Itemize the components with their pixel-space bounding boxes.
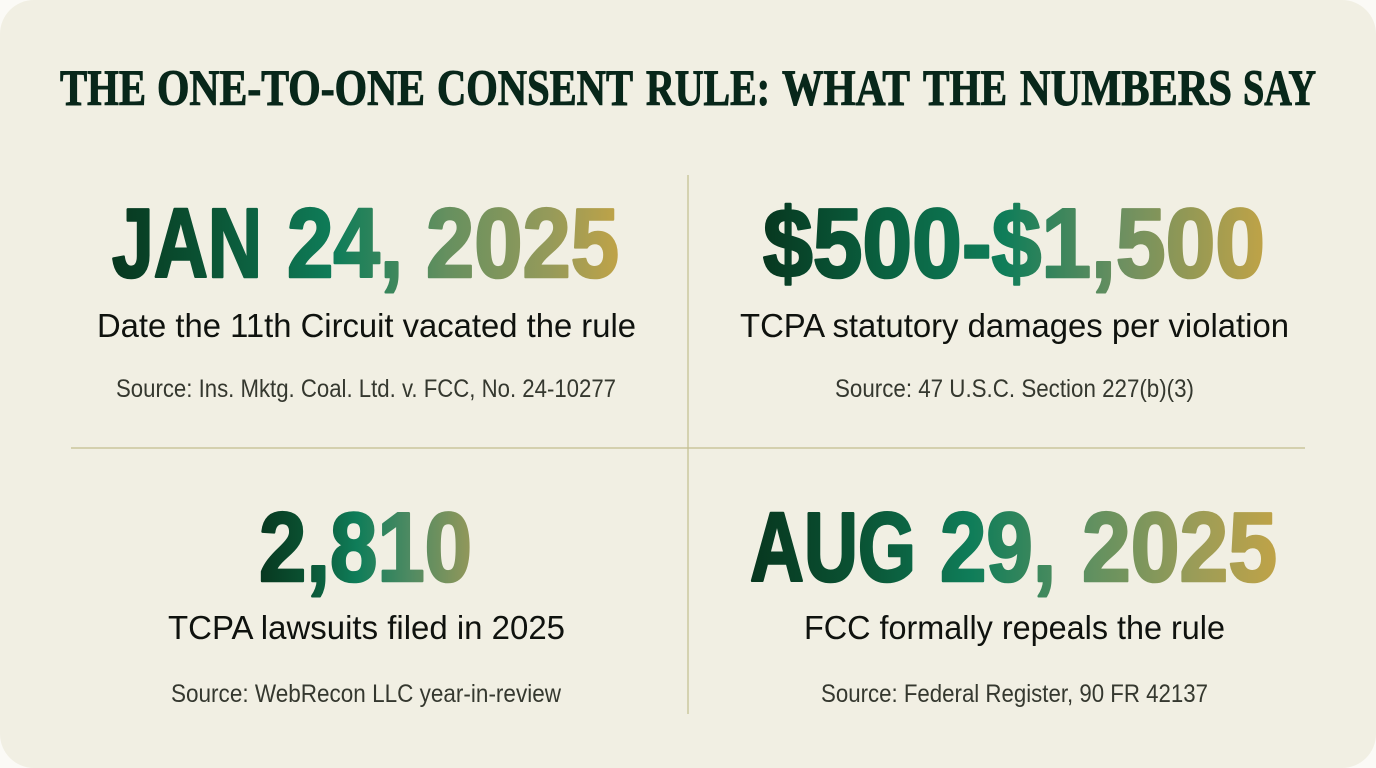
title: RULE: — [646, 61, 770, 117]
title: THE — [923, 61, 1007, 117]
panel: repeal date — [750, 492, 1277, 708]
source: repeal: Source: Federal Register, 90 FR 42137 — [821, 680, 1208, 708]
description: lawsuits: TCPA lawsuits filed in 2025 — [168, 609, 565, 646]
big number: Aug 29, 2025 — [750, 492, 1277, 602]
title: THE — [60, 61, 146, 117]
title: WHAT — [782, 61, 910, 117]
big number: damages: $500-$1,500 — [763, 188, 1265, 298]
big number: Jan 24, 2025: 24, — [287, 188, 403, 298]
big number: lawsuits: 2,810 — [259, 492, 472, 602]
big number: Jan 24, 2025 — [112, 188, 619, 298]
source: lawsuits: Source: WebRecon LLC year-in-review — [171, 680, 562, 708]
panel: vacated date — [97, 188, 636, 403]
big number: Jan 24, 2025: JAN — [112, 188, 262, 298]
description: repeal: FCC formally repeals the rule — [804, 609, 1225, 646]
panel: statutory damages — [740, 188, 1289, 403]
title: NUMBERS — [1020, 61, 1232, 117]
big number: Aug 29, 2025: 2025 — [1082, 492, 1277, 602]
title: SAY — [1243, 61, 1316, 117]
panel: lawsuits — [168, 492, 565, 708]
description: damages: TCPA statutory damages per violation — [740, 307, 1289, 344]
description: vacated: Date the 11th Circuit vacated the rule — [97, 307, 636, 344]
title: ONE-TO-ONE — [157, 61, 425, 117]
title — [60, 61, 1316, 117]
title: CONSENT — [437, 61, 633, 117]
big number: Aug 29, 2025: AUG — [750, 492, 916, 602]
big number: Aug 29, 2025: 29, — [940, 492, 1056, 602]
source: damages: Source: 47 U.S.C. Section 227(b)(3) — [835, 375, 1194, 403]
big number: Jan 24, 2025: 2025 — [426, 188, 619, 298]
source: vacated: Source: Ins. Mktg. Coal. Ltd. v. FCC, No. 24-10277 — [116, 375, 616, 403]
